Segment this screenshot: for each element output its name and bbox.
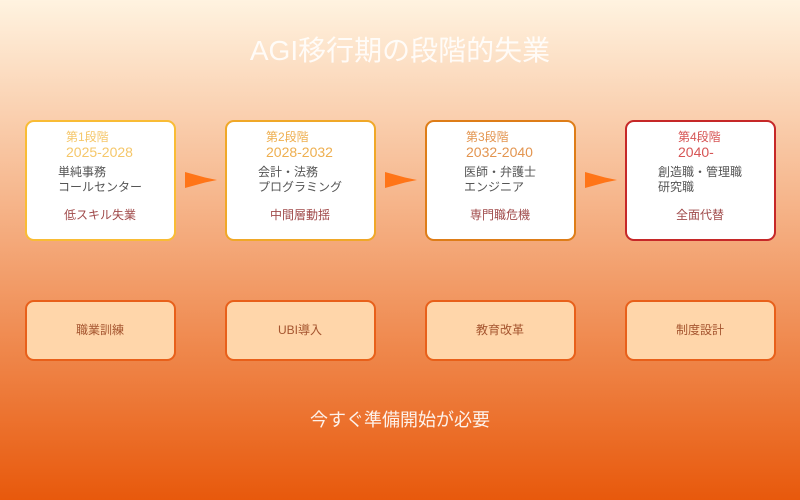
stage 3 impact: 専門職危機 bbox=[470, 208, 530, 222]
policy box 3: 教育改革 bbox=[476, 322, 524, 337]
panel: stage 4 bbox=[626, 121, 775, 240]
stage 4 years: 2040- bbox=[678, 144, 714, 160]
arrow 3 bbox=[585, 172, 617, 188]
policy box 3 bbox=[426, 301, 575, 360]
panel: stage 3 bbox=[426, 121, 575, 240]
stage 1 jobs: 単純事務 bbox=[58, 165, 106, 179]
stage 2 jobs: 会計・法務 bbox=[258, 165, 318, 179]
arrow 1 bbox=[185, 172, 217, 188]
stage 4 jobs: 創造職・管理職 bbox=[658, 165, 742, 179]
stage 3 jobs: エンジニア bbox=[464, 180, 524, 194]
stage 2 years: 2028-2032 bbox=[266, 144, 333, 160]
panel: stage 1 bbox=[26, 121, 175, 240]
stage 1 jobs: コールセンター bbox=[58, 180, 142, 194]
stage 2 impact: 中間層動揺 bbox=[270, 207, 330, 222]
footer message: 今すぐ準備開始が必要 bbox=[310, 410, 490, 430]
stage 2 label: 第2段階 bbox=[266, 129, 309, 144]
stage 4 jobs: 研究職 bbox=[658, 180, 694, 194]
stage 1 impact: 低スキル失業 bbox=[64, 207, 136, 222]
policy box 4 bbox=[626, 301, 775, 360]
policy box 2 bbox=[226, 301, 375, 360]
policy box 4: 制度設計 bbox=[676, 322, 724, 337]
stage 1 years: 2025-2028 bbox=[66, 144, 133, 160]
stage 1 label: 第1段階 bbox=[66, 129, 109, 144]
stage 4 label: 第4段階 bbox=[678, 129, 721, 144]
policy box 2: UBI導入 bbox=[278, 323, 322, 337]
stage 3 jobs: 医師・弁護士 bbox=[464, 165, 536, 179]
policy box 1: 職業訓練 bbox=[76, 323, 124, 337]
stage 4 impact: 全面代替 bbox=[676, 208, 724, 222]
stage 3 years: 2032-2040 bbox=[466, 144, 533, 160]
stage 2 jobs: プログラミング bbox=[258, 180, 342, 194]
policy box 1 bbox=[26, 301, 175, 360]
stage 3 label: 第3段階 bbox=[466, 129, 509, 144]
title: AGI移行期の段階的失業 bbox=[250, 35, 550, 66]
arrow 2 bbox=[385, 172, 417, 188]
panel: stage 2 bbox=[226, 121, 375, 240]
